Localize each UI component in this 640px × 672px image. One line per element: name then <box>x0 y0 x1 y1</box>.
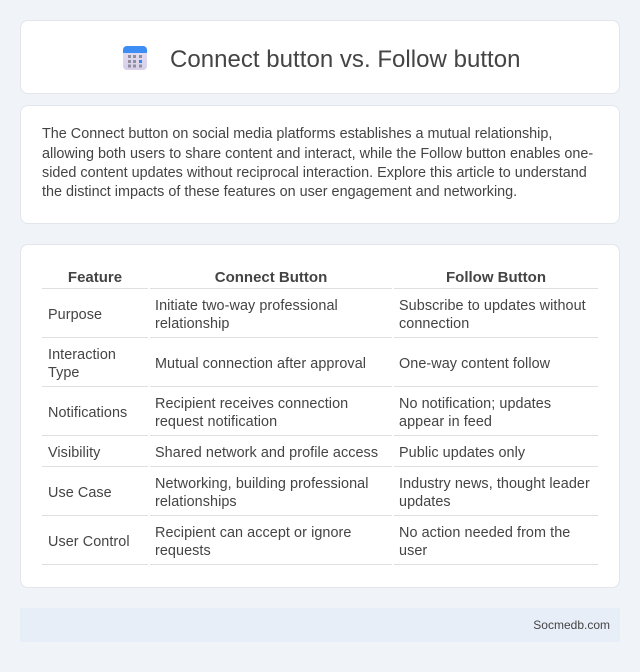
table header <box>68 269 546 286</box>
row: User Control: requests <box>155 543 211 559</box>
row: Use Case <box>48 476 590 510</box>
intro paragraph: the distinct impacts of these features on user engagement and networking. <box>42 184 517 200</box>
row: Purpose: relationship <box>155 316 229 332</box>
row: Interaction Type <box>48 347 550 381</box>
icon: calendar <box>123 46 147 70</box>
row: Use Case: Use Case <box>48 485 112 501</box>
table header: Feature <box>68 269 122 286</box>
row: Use Case: Industry news, thought leader <box>399 476 590 492</box>
row: Interaction Type: Type <box>48 365 79 381</box>
row: Visibility <box>48 445 525 461</box>
footer bar <box>20 608 620 642</box>
panel: comparison table <box>20 244 620 588</box>
row: Notifications: No notification; updates <box>399 396 551 412</box>
panel: intro text <box>20 105 620 224</box>
row: Visibility: Visibility <box>48 445 100 461</box>
row: User Control: User Control <box>48 534 130 550</box>
title: Connect button vs. Follow button <box>170 46 520 73</box>
footer credit: Socmedb.com <box>533 618 610 632</box>
panel: header <box>20 20 620 94</box>
row: User Control: No action needed from the <box>399 525 570 541</box>
row: Notifications: Notifications <box>48 405 127 421</box>
row: Use Case: relationships <box>155 494 237 510</box>
row: Purpose: Subscribe to updates without <box>399 298 586 314</box>
intro paragraph: The Connect button on social media platforms establishes a mutual relationship, <box>42 126 552 142</box>
row: Purpose: Initiate two-way professional <box>155 298 338 314</box>
row: Notifications: Recipient receives connection <box>155 396 348 412</box>
row: Purpose: Purpose <box>48 307 102 323</box>
table header: Follow Button <box>446 269 546 286</box>
intro paragraph <box>42 126 593 200</box>
row: Use Case: Networking, building professional <box>155 476 368 492</box>
row: Use Case: updates <box>399 494 451 510</box>
row: User Control: user <box>399 543 427 559</box>
row: Interaction Type: Interaction <box>48 347 116 363</box>
row: Notifications: appear in feed <box>399 414 492 430</box>
row: User Control: Recipient can accept or ignore <box>155 525 352 541</box>
row: Interaction Type: Mutual connection after approval <box>155 356 366 372</box>
row: Purpose <box>48 298 586 332</box>
row: User Control <box>48 525 570 559</box>
row: Interaction Type: One-way content follow <box>399 356 550 372</box>
row: Visibility: Public updates only <box>399 445 525 461</box>
row: Notifications: request notification <box>155 414 277 430</box>
intro paragraph: sided content updates without reciprocal interaction. Explore this article to understand <box>42 165 587 181</box>
table header: Connect Button <box>215 269 327 286</box>
row: Visibility: Shared network and profile access <box>155 445 378 461</box>
intro paragraph: allowing both users to share content and interact, while the Follow button enables one- <box>42 146 593 162</box>
row: Purpose: connection <box>399 316 469 332</box>
row: Notifications <box>48 396 551 430</box>
